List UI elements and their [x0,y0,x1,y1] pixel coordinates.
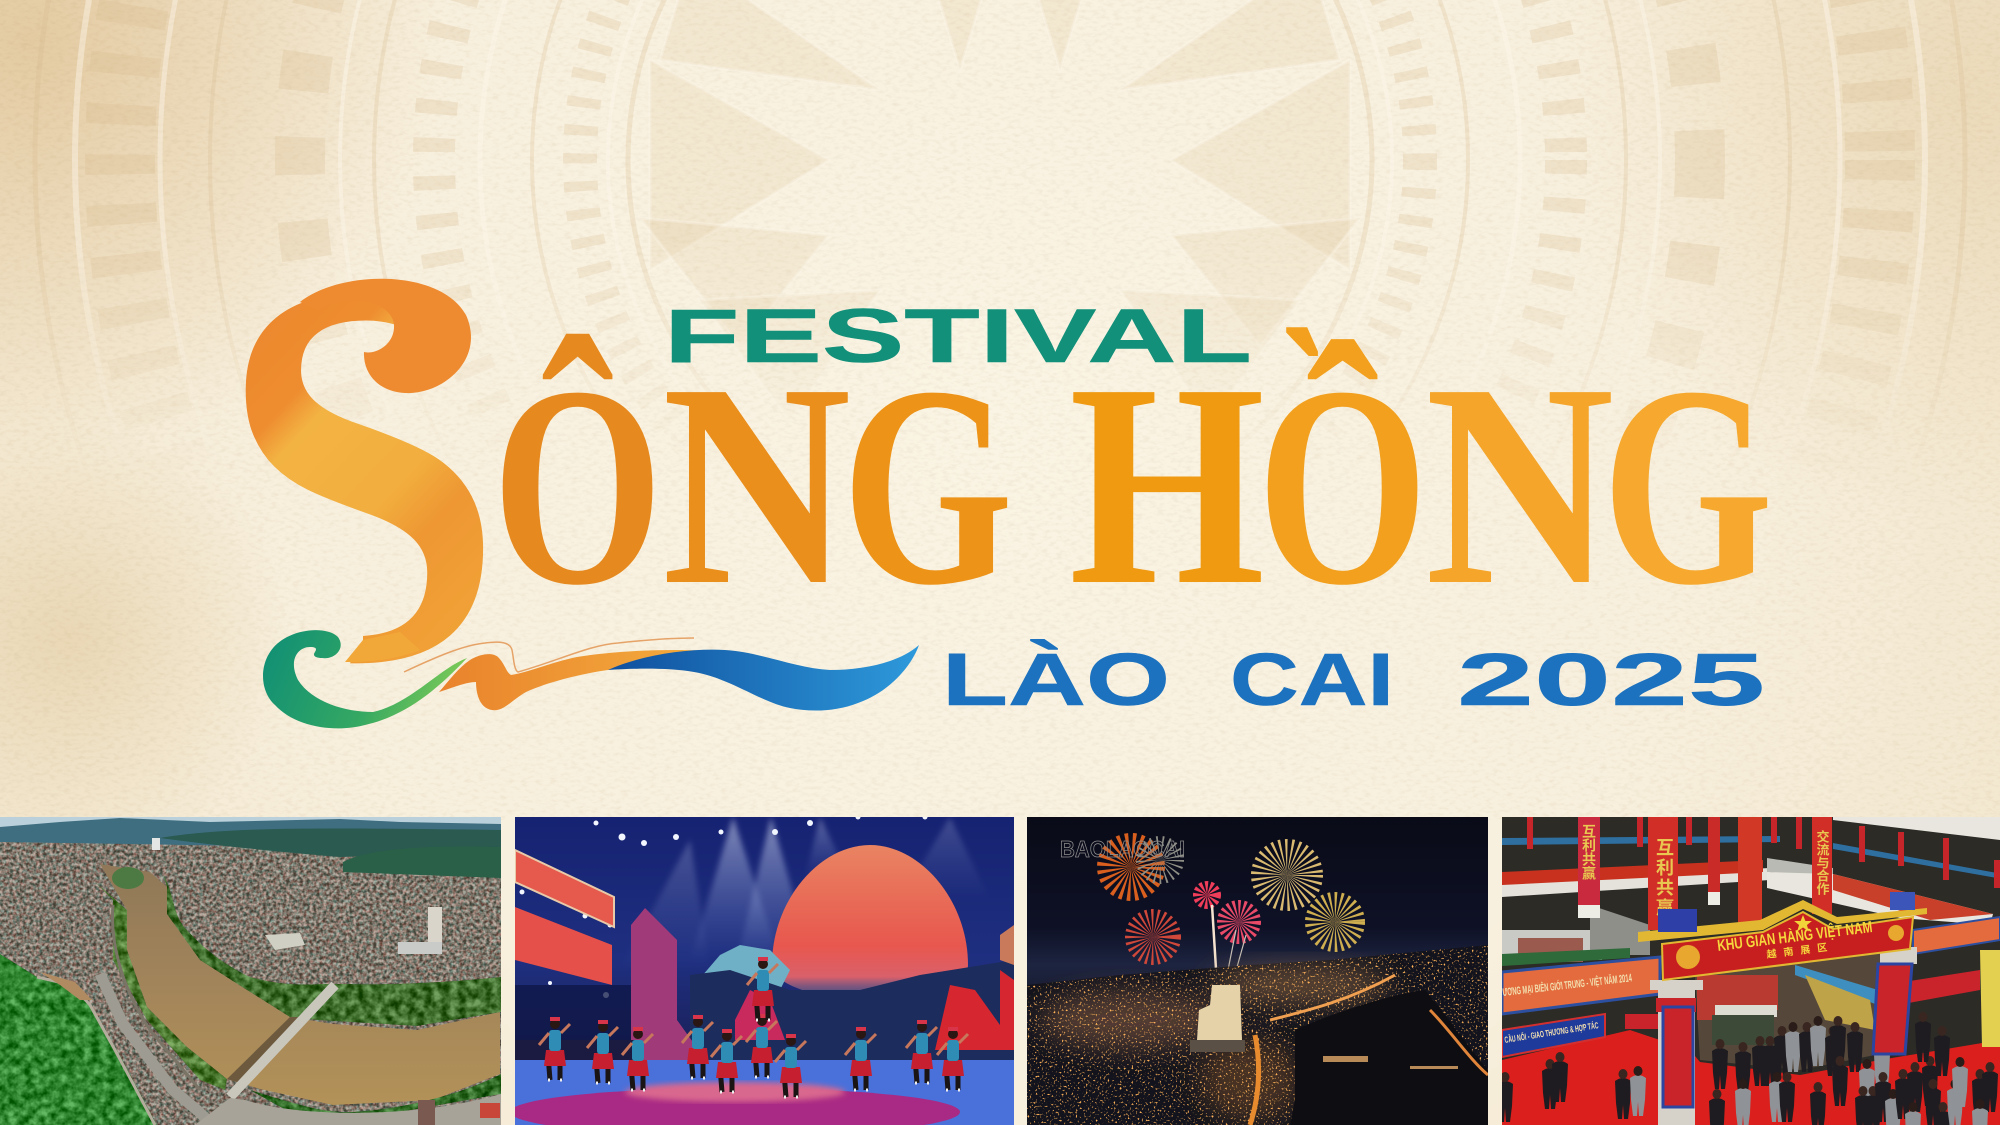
purple pillar [631,908,695,1060]
subtitle: Lào Cai 2025: 2025 [1457,638,1765,721]
heading: FESTIVAL: FESTIVAL [664,294,1252,379]
logo: Festival Sông Hồng Lào Cai 2025 [246,278,1768,728]
gate pillars [1650,947,1917,1125]
river banks [163,874,501,1026]
title: Sông Hồng: G [1602,329,1773,645]
subtitle: Lào Cai 2025: LÀO [942,638,1170,721]
title: Sông Hồng: N [662,324,851,645]
title: Sông Hồng: N [1425,324,1614,645]
bridge [230,985,335,1097]
title: Sông Hồng [246,278,1768,664]
watermark: BAOLAOCAI [1060,836,1185,862]
title: Sông Hồng: G [842,329,1013,645]
red hills [935,970,1014,1050]
hanging banners: 互利共赢 [1581,824,1597,881]
icon: green wave curl [263,630,467,728]
dark river [1290,990,1488,1125]
stage floor [515,1060,1014,1125]
title: Sông Hồng: S [216,166,505,777]
painted hills backdrop [690,945,790,990]
stage lights [520,814,928,998]
photo: night fireworks over the city [1027,817,1488,1125]
crowd [1497,1012,1998,1125]
riverside road [100,974,213,1125]
hanging banners: 交流与合作 [1814,829,1830,896]
illuminated tower [1197,985,1242,1040]
icon: orange wave ribbon [439,650,722,710]
gate roof and arch sign: 越南展区 [1766,940,1835,961]
arch sign text: KHU GIAN HÀNG VIỆT NAM [1716,917,1873,955]
fireworks [1114,848,1350,951]
photo: aerial view of Lao Cai and the Red River [0,817,501,1125]
river [100,864,500,1105]
title: Sông Hồng: Ô [492,329,663,645]
hanging banners [1578,817,1832,930]
icon: blue wave [608,645,919,711]
subtitle: Lào Cai 2025: CAI [1230,638,1394,721]
junction and waterfront road [195,1094,501,1125]
title: Sông Hồng: Ồ [1257,326,1428,645]
gate roof and arch sign [1638,892,1927,980]
side banners: ƯƠNG MẠI BIÊN GIỚI TRUNG - VIỆT NĂM 2014 [1502,971,1633,999]
red lanterns [1527,817,2000,888]
photo: Vietnam pavilion trade fair [1502,817,2000,1125]
hanging banners: 互利共赢 [1654,838,1674,918]
bridge shadow [227,1017,302,1083]
subtitle: Lào Cai 2025 [942,638,1765,721]
icon: drum star rays [644,0,1356,367]
title: Sông Hồng: H [1069,324,1265,645]
upper floors and balconies [1833,817,2000,840]
red carpet [1502,1030,2000,1125]
river wave flourish [263,630,919,728]
city lights [1027,945,1488,1125]
left LED screens [515,850,614,927]
photo: stage performance with dancers [515,817,1014,1125]
red setting sun [772,845,968,1000]
side banners: CẦU NỐI - GIAO THƯƠNG & HỢP TÁC [1504,1019,1599,1045]
side banners [1502,917,2000,1057]
dancers [539,957,968,1097]
booth interior [1695,950,1900,1070]
background pattern: bronze drum motif [32,0,1968,393]
forested hill [0,954,157,1125]
